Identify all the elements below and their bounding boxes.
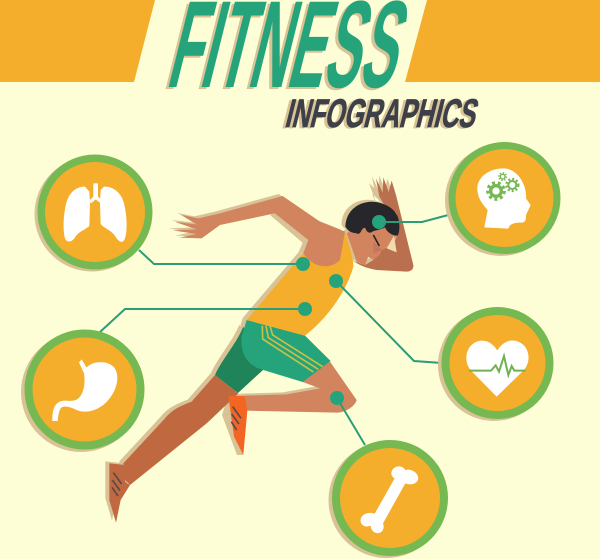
panel: lungs — [34, 154, 152, 272]
left banner — [0, 0, 155, 82]
panel: stomach — [21, 330, 144, 452]
runner figure — [109, 177, 413, 523]
back leg — [109, 375, 238, 523]
shorts stripes — [262, 326, 323, 372]
panel: bone — [328, 440, 448, 558]
front leg — [228, 362, 357, 455]
front shoe — [228, 396, 247, 455]
panel: brain — [445, 142, 560, 256]
right banner — [405, 0, 600, 82]
icon: bone — [361, 466, 418, 533]
shorts and tank top — [215, 232, 353, 393]
subtitle: INFOGRAPHICS: INFOGRAPHICS — [279, 92, 480, 137]
panel: heart — [438, 307, 554, 421]
icon: lungs — [64, 183, 127, 242]
head and front arm — [345, 177, 413, 272]
title: FITNESS — [155, 0, 421, 116]
subtitle: INFOGRAPHICS — [279, 91, 483, 137]
icon: stomach — [52, 359, 117, 421]
icon: heart with pulse — [466, 341, 529, 397]
connector dots — [296, 215, 386, 405]
subtitle: INFOGRAPHICS: INFOGRAPHICS — [282, 91, 483, 136]
hand shadow fingers — [369, 183, 392, 212]
underarm shadow — [270, 213, 308, 253]
back arm — [173, 196, 345, 266]
connector lines — [100, 214, 452, 445]
icon: head with gears — [477, 168, 531, 229]
shoe stripes — [112, 407, 241, 496]
back shoe — [109, 463, 130, 523]
front shoe shadow — [222, 396, 243, 455]
